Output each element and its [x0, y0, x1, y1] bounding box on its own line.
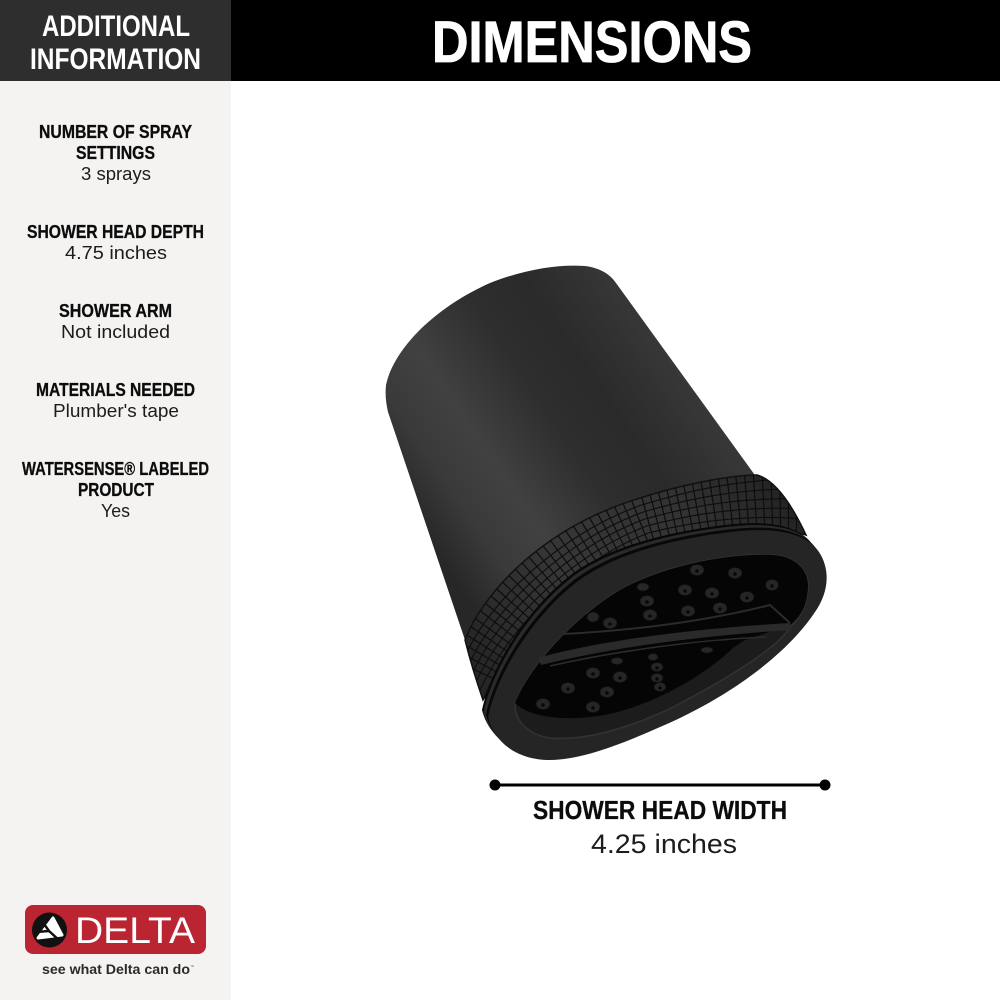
sidebar background: [0, 81, 231, 1000]
nozzles: [536, 564, 778, 712]
header: additional information: [0, 0, 231, 81]
header: additional information: INFORMATION: [30, 43, 201, 76]
spec: watersense labeled product: WATERSENSE® LABELED: [22, 459, 209, 479]
width dimension line: [490, 780, 830, 790]
delta logo: see what Delta can do: [42, 961, 190, 977]
spray divider bar: [538, 623, 792, 665]
face outer rim: [488, 530, 827, 760]
spec: shower arm: [59, 301, 172, 342]
width label: [533, 795, 787, 859]
spec: shower arm: SHOWER ARM: [59, 301, 172, 321]
logo badge: [25, 905, 206, 954]
delta logo: [25, 905, 206, 977]
knurled grip ring: [465, 475, 810, 700]
spec: materials needed: [36, 380, 195, 421]
spec: number of spray settings: [39, 122, 192, 184]
spray recess interior: [515, 555, 808, 718]
spec: shower arm: Not included: [61, 321, 170, 342]
spec: shower head depth: 4.75 inches: [65, 242, 167, 263]
spec: watersense labeled product: PRODUCT: [78, 480, 154, 500]
spec: number of spray settings: 3 sprays: [81, 163, 151, 184]
spec: number of spray settings: NUMBER OF SPRAY: [39, 122, 192, 142]
logo emblem: [32, 912, 67, 948]
shower head body: [386, 266, 775, 715]
face recess: [515, 555, 808, 738]
spec: watersense labeled product: Yes: [101, 500, 130, 521]
nozzle openings: [543, 571, 772, 708]
width label: 4.25 inches: [591, 829, 737, 859]
shower head product image: [386, 266, 827, 760]
spec: materials needed: Plumber's tape: [53, 400, 179, 421]
collar grooves behind the face: [482, 523, 825, 758]
delta logo: DELTA: [75, 910, 195, 951]
header: dimensions title: [231, 0, 1000, 81]
header: dimensions title: DIMENSIONS: [432, 10, 752, 75]
spec: materials needed: MATERIALS NEEDED: [36, 380, 195, 400]
spec: watersense labeled product: [22, 459, 209, 521]
delta logo: ™: [190, 964, 194, 969]
spec: shower head depth: [27, 222, 204, 263]
width label: SHOWER HEAD WIDTH: [533, 795, 787, 825]
spec: number of spray settings: SETTINGS: [76, 143, 155, 163]
spec: shower head depth: SHOWER HEAD DEPTH: [27, 222, 204, 242]
header: additional information: ADDITIONAL: [42, 10, 190, 43]
